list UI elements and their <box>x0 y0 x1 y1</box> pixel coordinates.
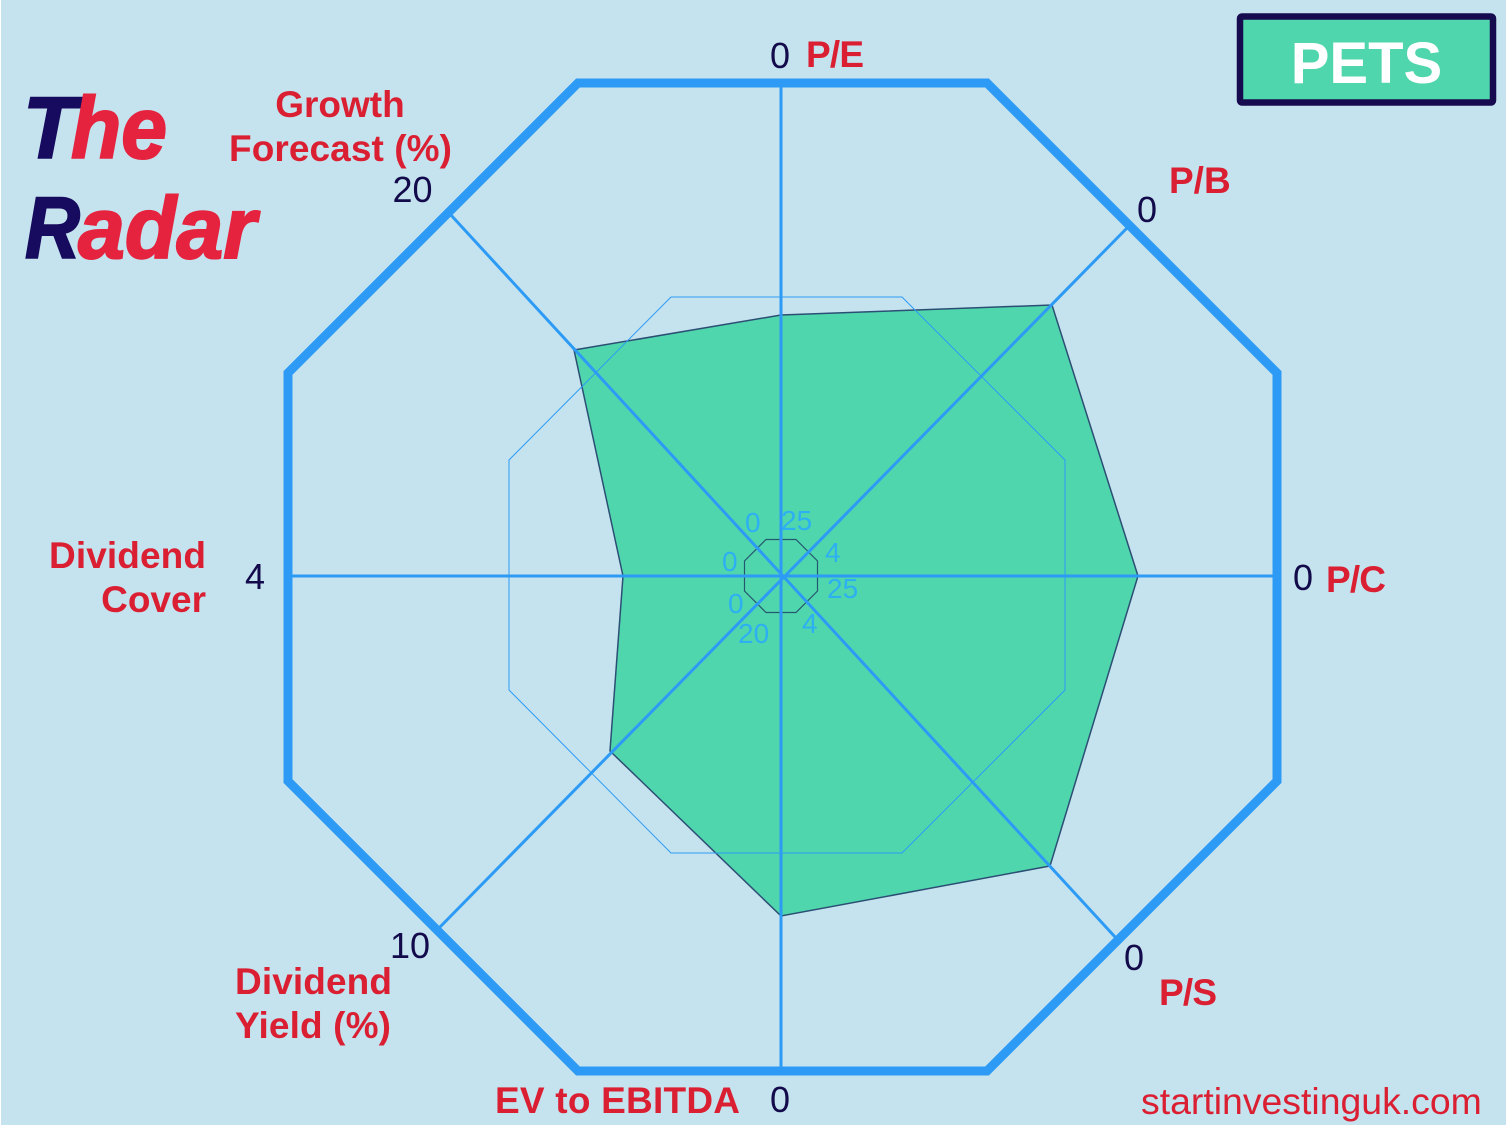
axis label: Dividend Cover: Cover <box>101 579 206 620</box>
axis value: Dividend Cover: 4 <box>245 556 265 597</box>
axis label: P/B: P/B <box>1169 160 1231 201</box>
middle reference octagon <box>509 297 1065 853</box>
axis value: Growth Forecast: 20 <box>392 169 433 210</box>
ticker badge: PETS <box>1240 16 1493 102</box>
axis label: EV to EBITDA: EV to EBITDA <box>495 1080 740 1121</box>
source website: startinvestinguk.com <box>1141 1080 1482 1122</box>
title: The Radar <box>23 80 260 277</box>
axis label: Dividend Yield: Yield (%) <box>235 1005 391 1046</box>
axis label: Growth Forecast: Growth <box>275 84 405 125</box>
title: The Radar: adar <box>78 180 260 277</box>
axis label: P/C: P/C <box>1326 559 1386 600</box>
axis label: Dividend Yield <box>235 961 392 1046</box>
radar chart <box>288 83 1277 1071</box>
inner scale labels: 25 <box>827 573 858 604</box>
inner scale labels: 4 <box>802 608 818 639</box>
radar axes <box>292 87 1273 1067</box>
axis label: Dividend Cover <box>49 535 206 620</box>
inner scale labels: 4 <box>825 537 841 568</box>
ticker badge: PETS: PETS <box>1291 31 1442 96</box>
inner scale labels: 0 <box>728 588 744 619</box>
axis value: P/E: 0 <box>770 35 790 76</box>
axis label: Growth Forecast: Forecast (%) <box>229 128 452 169</box>
outer octagon frame <box>288 83 1277 1071</box>
axis value: Dividend Yield: 10 <box>390 925 430 966</box>
axis value: P/C: 0 <box>1293 557 1313 598</box>
title: The Radar: R <box>25 180 80 277</box>
inner reference octagon <box>744 540 818 612</box>
data polygon <box>574 305 1138 916</box>
inner scale labels <box>722 505 858 649</box>
axis label: P/S: P/S <box>1159 972 1217 1013</box>
inner scale labels: 20 <box>738 618 769 649</box>
axis value: P/B: 0 <box>1137 189 1157 230</box>
title: The Radar: he <box>71 80 167 177</box>
inner scale labels: 25 <box>781 505 812 536</box>
axis label: Dividend Yield: Dividend <box>235 961 392 1002</box>
axis value: EV to EBITDA: 0 <box>770 1079 790 1120</box>
axis value: P/S: 0 <box>1124 937 1144 978</box>
axis label: Growth Forecast <box>229 84 452 169</box>
inner scale labels: 0 <box>722 546 738 577</box>
inner scale labels: 0 <box>745 507 761 538</box>
axis label: P/E: P/E <box>806 34 864 75</box>
axis label: Dividend Cover: Dividend <box>49 535 206 576</box>
title: The Radar: T <box>23 80 83 177</box>
